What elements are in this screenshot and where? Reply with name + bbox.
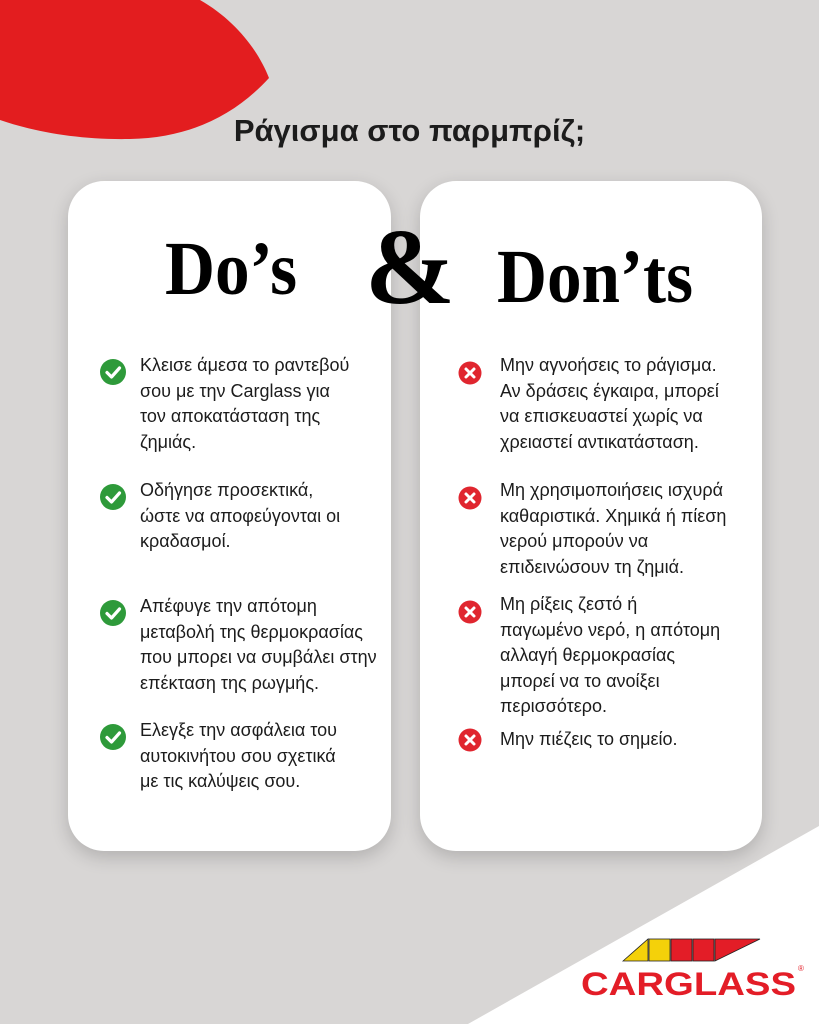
do item 3: Απέφυγε την απότομη — [140, 596, 317, 616]
do item 2: Οδήγησε προσεκτικά, — [140, 480, 313, 500]
do item 1 — [100, 355, 349, 452]
panel: do's — [68, 181, 391, 851]
do item 3: επέκταση της ρωγμής. — [140, 672, 319, 692]
dont item 1: Αν δράσεις έγκαιρα, μπορεί — [500, 380, 719, 400]
do item 1: σου με την Carglass για — [140, 380, 330, 400]
do item 2: κραδασμοί. — [140, 531, 231, 551]
do item 4: με τις καλύψεις σου. — [140, 771, 300, 791]
dont item 3 — [458, 594, 720, 716]
do item 1: Κλεισε άμεσα το ραντεβού — [140, 355, 349, 375]
do item 1: ζημιάς. — [140, 432, 196, 452]
do items — [100, 355, 377, 791]
dont item 3: αλλαγή θερμοκρασίας — [500, 645, 675, 665]
do item 4: Ελεγξε την ασφάλεια του — [140, 720, 337, 740]
logo: Carglass — [581, 938, 804, 1002]
title: Ράγισμα στο παρμπρίζ; — [234, 113, 585, 148]
logo: Carglass: CARGLASS — [581, 966, 796, 1002]
do item 2: ώστε να αποφεύγονται οι — [140, 506, 340, 526]
dont item 3: περισσότερο. — [500, 696, 607, 716]
dont item 1: Μην αγνοήσεις το ράγισμα. — [500, 355, 717, 375]
dont item 2: νερού μπορούν να — [500, 531, 648, 551]
decorative red shape top-left — [0, 0, 269, 140]
do item 4 — [100, 720, 337, 791]
dont item 1: να επισκευαστεί χωρίς να — [500, 406, 703, 426]
do item 4: αυτοκινήτου σου σχετικά — [140, 746, 336, 766]
dont item 4: Μην πιέζεις το σημείο. — [500, 729, 677, 749]
do item 3: που μπορει να συμβάλει στην — [140, 647, 377, 667]
do item 1: τον αποκατάσταση της — [140, 406, 320, 426]
do item 3: μεταβολή της θερμοκρασίας — [140, 622, 363, 642]
dont items — [458, 355, 726, 752]
logo: Carglass: ® — [798, 964, 804, 973]
dont item 2: Μη χρησιμοποιήσεις ισχυρά — [500, 480, 723, 500]
dont item 2: καθαριστικά. Χημικά ή πίεση — [500, 506, 726, 526]
dont item 2: επιδεινώσουν τη ζημιά. — [500, 556, 684, 576]
dont item 3: Μη ρίξεις ζεστό ή — [500, 594, 637, 614]
dont item 1: χρειαστεί αντικατάσταση. — [500, 432, 699, 452]
dont item 3: παγωμένο νερό, η απότομη — [500, 620, 720, 640]
dont item 3: μπορεί να το ανοίξει — [500, 670, 660, 690]
do item 2 — [100, 480, 340, 551]
dont item 1 — [458, 355, 719, 452]
dont item 2 — [458, 480, 726, 577]
do item 3 — [100, 596, 377, 693]
panel: don'ts — [420, 181, 762, 851]
